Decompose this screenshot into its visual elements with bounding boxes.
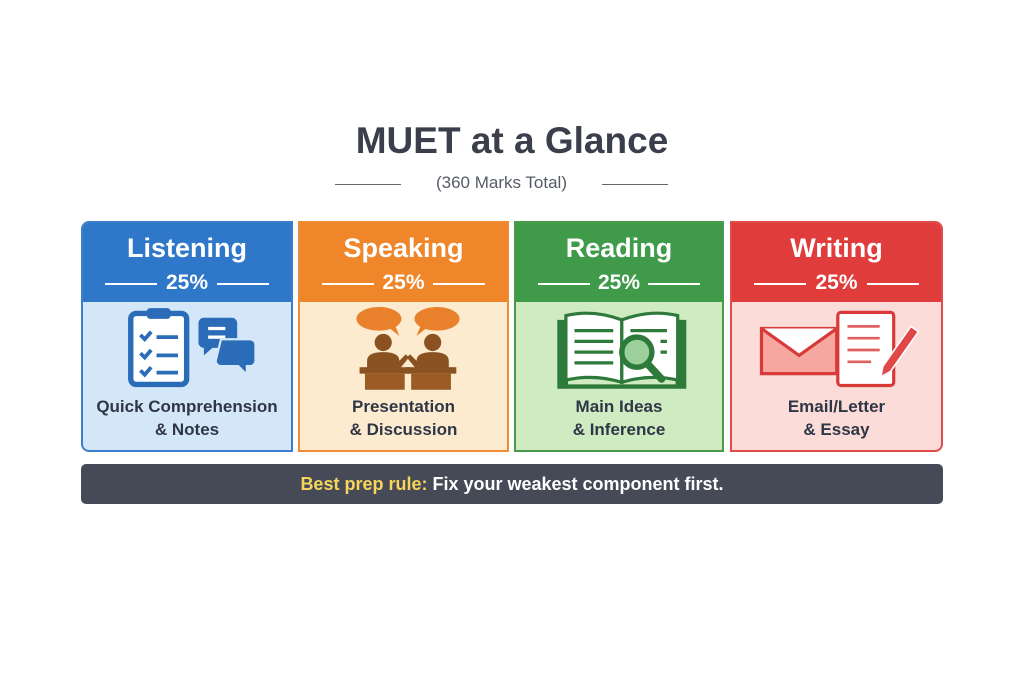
panel: speaking [298,221,509,452]
panel: listening [81,221,293,452]
header: reading: Reading [566,233,672,263]
icon: envelope, letter and pencil [760,310,920,388]
caption: listening: & Notes [155,420,219,439]
panel: reading [514,221,724,452]
subtitle: (360 Marks Total) [436,173,567,192]
caption: speaking [350,397,457,439]
header: writing [732,223,941,302]
header: speaking [300,223,507,302]
caption: speaking: Presentation [352,397,455,416]
bottom banner: Best prep rule: Fix your weakest component first. [300,474,724,494]
header: listening: Listening [127,233,247,263]
header: reading [516,223,722,302]
caption: reading [573,397,665,439]
icon: two speakers [356,307,460,390]
caption: speaking: & Discussion [350,420,457,439]
icon: clipboard and chat [128,308,254,388]
title: MUET at a Glance [356,120,668,161]
caption: writing: Email/Letter [788,397,885,416]
header: speaking: Speaking [343,233,464,263]
caption: writing: & Essay [803,420,870,439]
caption: reading: Main Ideas [576,397,662,416]
header: listening [83,223,291,302]
icon: book with magnifier [557,312,686,389]
caption: listening: Quick Comprehension [96,397,278,416]
header: speaking: 25% [382,271,425,294]
caption: listening [96,397,278,439]
caption: reading: & Inference [573,420,665,439]
header: reading: 25% [598,271,640,294]
bottom banner [81,464,943,504]
panel: writing [730,221,943,452]
header: writing: Writing [790,233,883,263]
header: listening: 25% [166,271,208,294]
header: writing: 25% [815,271,858,294]
caption: writing [788,397,885,439]
